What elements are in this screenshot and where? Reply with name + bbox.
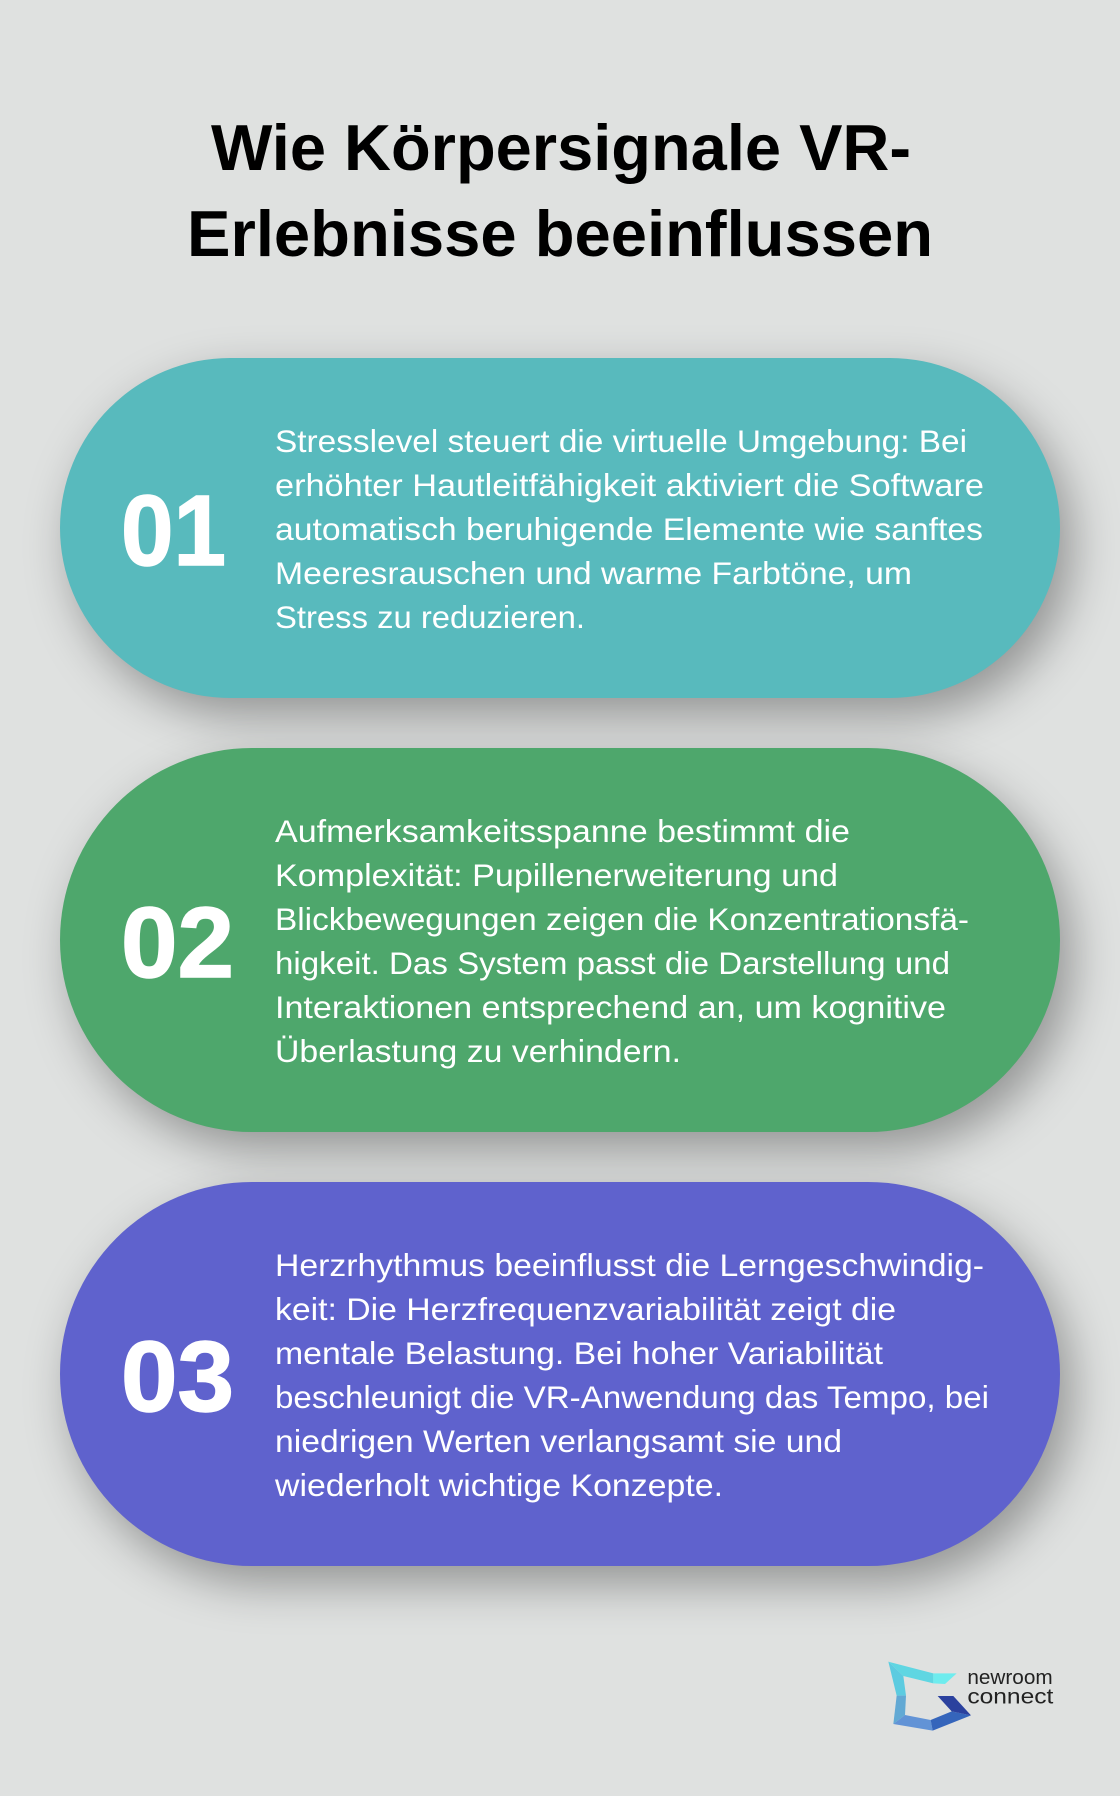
panel: step 03 [60,1182,1060,1566]
logo: newroom connect [888,1662,1054,1731]
text: step 01: Stresslevel steuert die virtuelle Umgebung: Bei [275,423,967,459]
panel: step 01 [60,358,1060,698]
text: step 02 [275,813,969,1069]
number 02: 02 [121,887,234,999]
text: step 02: Überlastung zu verhindern. [275,1033,681,1069]
text: step 01: erhöhter Hautleitfähigkeit aktiviert die Software [275,467,984,503]
text: step 02: Blickbewegungen zeigen die Konzentrationsfä- [275,901,969,937]
logo: newroom connect: newroom [967,1667,1053,1689]
text: step 01: Meeresrauschen und warme Farbtöne, um [275,555,912,591]
title [187,111,933,270]
text: step 02: Komplexität: Pupillenerweiterung und [275,857,838,893]
text: step 03: mentale Belastung. Bei hoher Variabilität [275,1335,883,1371]
text: step 03: keit: Die Herzfrequenzvariabilität zeigt die [275,1291,896,1327]
text: step 03: beschleunigt die VR-Anwendung das Tempo, bei [275,1379,989,1415]
panel: step 02 [60,748,1060,1132]
text: step 02: Aufmerksamkeitsspanne bestimmt die [275,813,850,849]
logo: newroom connect: connect [967,1684,1053,1708]
text: step 02: Interaktionen entsprechend an, um kognitive [275,989,946,1025]
text: step 03: Herzrhythmus beeinflusst die Lerngeschwindig- [275,1247,984,1283]
number 03: 03 [121,1321,234,1433]
text: step 03: niedrigen Werten verlangsamt sie und [275,1423,842,1459]
number 01: 01 [121,475,226,587]
title: Wie Körpersignale VR- [211,111,911,184]
text: step 03 [274,1247,989,1503]
text: step 01: automatisch beruhigende Elemente wie sanftes [275,511,983,547]
text: step 01 [275,423,984,635]
title: Erlebnisse beeinflussen [187,197,933,270]
text: step 03: wiederholt wichtige Konzepte. [274,1467,723,1503]
text: step 01: Stress zu reduzieren. [275,599,585,635]
text: step 02: higkeit. Das System passt die Darstellung und [275,945,950,981]
